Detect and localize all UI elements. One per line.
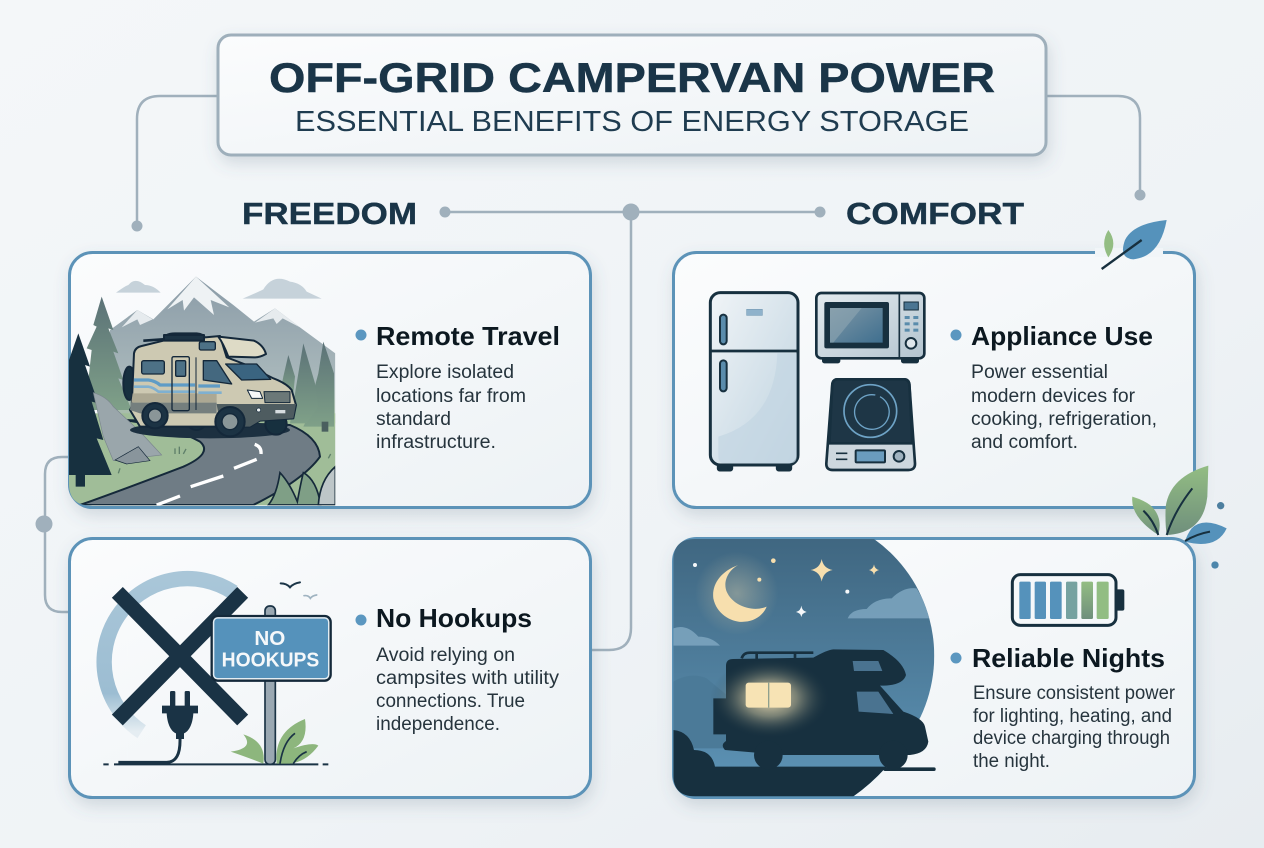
- description: and comfort.: [971, 432, 1078, 453]
- ground: [673, 730, 890, 802]
- illustration: campervan on mountain road: [69, 277, 336, 507]
- moon glow: [700, 557, 773, 630]
- background trees: [80, 297, 334, 432]
- bottom leaf cluster: [1132, 466, 1227, 569]
- lit window: [746, 683, 791, 708]
- fridge: [710, 293, 798, 470]
- bullet: [950, 330, 962, 340]
- description: [376, 645, 560, 735]
- sign: [212, 616, 331, 681]
- title: OFF-GRID CAMPERVAN POWER: [269, 54, 995, 101]
- bullet: [356, 614, 366, 626]
- stars: [757, 558, 879, 582]
- foreground grass: [268, 467, 335, 505]
- induction cooktop: [826, 379, 915, 470]
- sign: HOOKUPS: [222, 650, 319, 672]
- description: Explore isolated: [376, 362, 514, 383]
- leaves: [231, 719, 318, 764]
- microwave: [816, 293, 924, 362]
- panel: no hookups: [70, 538, 590, 798]
- ground: [69, 413, 336, 507]
- top leaf sprig: [1102, 220, 1167, 269]
- arc: [104, 579, 233, 732]
- illustration: crossed-out plug and sign: [103, 579, 331, 764]
- description: Avoid relying on: [376, 645, 515, 666]
- description: for lighting, heating, and: [973, 706, 1172, 727]
- panel: appliance use: [674, 248, 1194, 508]
- description: campsites with utility: [376, 668, 560, 689]
- van windows: [853, 661, 893, 714]
- heading: Appliance Use: [971, 321, 1153, 351]
- heading: No Hookups: [376, 603, 532, 633]
- moon: [713, 565, 767, 622]
- hill: [674, 686, 726, 748]
- van shadow: [130, 425, 290, 438]
- plug: [118, 691, 198, 762]
- description: Ensure consistent power: [973, 683, 1176, 704]
- bullet: [950, 652, 962, 664]
- description: the night.: [973, 751, 1050, 772]
- sign: NO: [254, 628, 285, 650]
- birds: [281, 582, 317, 598]
- road dashes: [157, 444, 261, 505]
- description: connections. True: [376, 691, 525, 712]
- rocks: [93, 393, 162, 464]
- description: device charging through: [973, 728, 1170, 749]
- description: infrastructure.: [376, 432, 496, 453]
- description: locations far from: [376, 386, 526, 407]
- sign post: [265, 606, 275, 764]
- description: independence.: [376, 714, 500, 735]
- description: [973, 683, 1176, 772]
- decorative leaves: [1102, 220, 1227, 569]
- ground strip: [883, 767, 936, 771]
- road: [80, 420, 320, 505]
- clouds: [116, 279, 322, 299]
- window glow: [710, 658, 830, 738]
- connector lines: [36, 96, 1146, 650]
- mountains: [110, 277, 335, 423]
- description: cooking, refrigeration,: [971, 409, 1157, 430]
- dark tree: [69, 333, 112, 487]
- title banner: [218, 35, 1046, 155]
- cross: [117, 592, 243, 720]
- description: modern devices for: [971, 386, 1136, 407]
- panel: reliable nights: [670, 535, 1194, 802]
- icon: battery: [1012, 575, 1124, 625]
- campervan: [123, 333, 296, 436]
- subtitle: ESSENTIAL BENEFITS OF ENERGY STORAGE: [295, 106, 969, 138]
- icons: appliances: [710, 293, 924, 470]
- bullet: [356, 330, 366, 340]
- clouds: [673, 588, 933, 646]
- heading: freedom: FREEDOM: [242, 196, 417, 231]
- border gap behind leaf: [1095, 248, 1163, 257]
- description: Power essential: [971, 362, 1108, 383]
- van silhouette: [713, 649, 928, 769]
- ground line: [103, 761, 328, 767]
- heading: Reliable Nights: [972, 643, 1165, 673]
- description: standard: [376, 409, 451, 430]
- heading: comfort: COMFORT: [846, 196, 1024, 231]
- description: [971, 362, 1157, 453]
- panel: remote travel: [69, 252, 591, 508]
- illustration: campervan at night: [670, 535, 943, 802]
- description: [376, 362, 526, 453]
- heading: Remote Travel: [376, 321, 560, 351]
